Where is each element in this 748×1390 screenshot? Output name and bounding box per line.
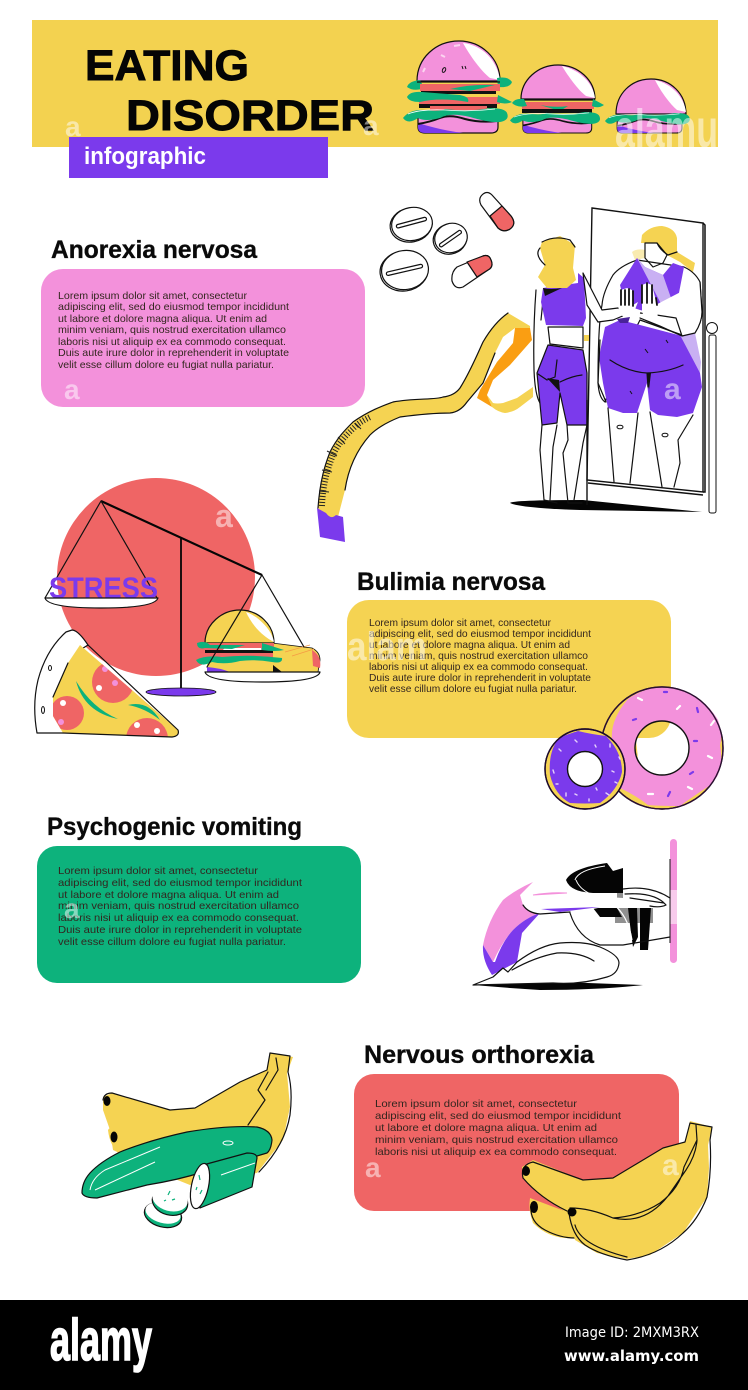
reflection legs <box>608 408 693 487</box>
panel: Psychogenic vomiting <box>37 846 361 983</box>
footer logo: alamy <box>50 1308 152 1373</box>
watermark: banner: a <box>65 111 81 142</box>
illustration: scale with stress and food: a <box>215 498 233 534</box>
illustration: mirror with reflection: a <box>664 373 681 406</box>
illustration: person vomiting over toilet <box>473 839 677 990</box>
left pan strings <box>45 501 157 598</box>
text block: Psychogenic: velit esse cillum dolore eu fugiat nulla pariatur. <box>58 937 286 948</box>
text block: Anorexia: minim veniam, quis nostrud exercitation ullamco <box>58 325 286 336</box>
text block: Nervous orthorexia: ut labore et dolore magna aliqua. Ut enim ad <box>375 1123 597 1134</box>
panel: Anorexia nervosa: a <box>64 374 80 405</box>
woman arms <box>534 290 540 403</box>
text block: Nervous orthorexia: minim veniam, quis nostrud exercitation ullamco <box>375 1135 618 1146</box>
text block: Psychogenic: Duis aute irure dolor in reprehenderit in voluptate <box>58 925 302 936</box>
woman legs <box>540 425 587 503</box>
icon: mirror stand <box>706 322 718 513</box>
woman shorts <box>537 345 587 425</box>
reflection top <box>620 258 684 317</box>
text block: Psychogenic: laboris nisi ut aliquip ex ea commodo consequat. <box>58 913 299 924</box>
panel: Bulimia nervosa <box>347 600 671 738</box>
hot dog <box>262 643 320 672</box>
reflection forearm <box>640 282 702 336</box>
text block: Anorexia: velit esse cillum dolore eu fugiat nulla pariatur. <box>58 360 274 371</box>
right pan strings <box>207 575 304 667</box>
text block: Nervous orthorexia: laboris nisi ut aliquip ex ea commodo consequat. <box>375 1147 617 1158</box>
text block: Bulimia: Duis aute irure dolor in reprehenderit in voluptate <box>369 673 591 684</box>
illustration: mirror with reflection <box>587 208 705 495</box>
icon: pills <box>377 192 514 294</box>
text block: Bulimia: Lorem ipsum dolor sit amet, consectetur <box>369 618 552 629</box>
text block: Bulimia: ut labore et dolore magna aliqua. Ut enim ad <box>369 640 570 651</box>
icon: measuring tape <box>317 313 533 542</box>
icon: medium burger <box>510 65 604 133</box>
illustration: woman from behind <box>534 236 658 505</box>
reflection arms <box>598 260 702 402</box>
icon: large burger <box>403 41 512 133</box>
reflection light halo <box>632 249 645 260</box>
text block: Anorexia: Duis aute irure dolor in reprehenderit in voluptate <box>58 348 289 359</box>
icon: pizza slice <box>34 629 179 738</box>
panel: Anorexia nervosa <box>41 269 365 407</box>
watermark: banner <box>65 99 718 159</box>
text block: Anorexia: ut labore et dolore magna aliqua. Ut enim ad <box>58 314 267 325</box>
woman top <box>541 273 586 326</box>
reflection belly and shorts <box>599 320 702 417</box>
text block: Anorexia: Lorem ipsum dolor sit amet, consectetur <box>58 291 248 302</box>
footer image id: Image ID: 2MXM3RX <box>565 1325 699 1341</box>
top pink <box>483 882 540 962</box>
title: EATING <box>85 42 249 90</box>
reflection hair <box>641 226 695 272</box>
floor shadow <box>473 980 643 990</box>
panel: title banner <box>32 20 718 159</box>
burger on pan <box>196 610 284 672</box>
woman waist <box>548 327 583 348</box>
cucumber <box>82 1127 272 1198</box>
arm <box>523 893 628 914</box>
panel: Bulimia nervosa: alam <box>347 625 427 669</box>
text block: Psychogenic: Lorem ipsum dolor sit amet, consectetur <box>58 866 259 877</box>
icon: small burger <box>605 79 690 133</box>
text block: Psychogenic: ut labore et dolore magna aliqua. Ut enim ad <box>58 890 279 901</box>
label: infographic: infographic <box>84 143 206 170</box>
title: DISORDER <box>126 92 374 140</box>
reflection head <box>645 243 667 267</box>
illustration: scale with stress and food <box>45 478 320 696</box>
icon: purple donut <box>545 729 625 809</box>
text block: Anorexia: adipiscing elit, sed do eiusmod tempor incididunt <box>58 302 289 313</box>
text block: Bulimia: adipiscing elit, sed do eiusmod tempor incididunt <box>369 629 591 640</box>
top purple <box>483 913 540 975</box>
woman hair <box>538 236 576 288</box>
stress label: STRESS <box>49 572 158 605</box>
reflection light stripe low <box>680 333 701 373</box>
heading: Psychogenic vomiting: Psychogenic vomiting <box>47 813 302 841</box>
cucumber slices <box>142 1198 184 1232</box>
label: infographic <box>69 137 328 178</box>
text block: Psychogenic: adipiscing elit, sed do eiusmod tempor incididunt <box>58 878 302 889</box>
legs <box>473 942 619 985</box>
icon: bananas: a <box>662 1149 679 1182</box>
right pan <box>205 672 320 682</box>
text block: Nervous orthorexia: Lorem ipsum dolor sit amet, consectetur <box>375 1099 578 1110</box>
footer url: www.alamy.com <box>564 1347 699 1365</box>
heading: Anorexia nervosa: Anorexia nervosa <box>51 236 258 264</box>
panel: Nervous orthorexia <box>354 1074 679 1211</box>
text block: Anorexia: laboris nisi ut aliquip ex ea commodo consequat. <box>58 337 286 348</box>
shadow under figure <box>510 500 702 512</box>
icon: pink donut <box>600 680 723 809</box>
reflection body lines <box>610 360 683 387</box>
red circle <box>57 478 255 676</box>
panel: Nervous orthorexia: a <box>365 1152 381 1183</box>
text block: Psychogenic: minim veniam, quis nostrud exercitation ullamco <box>58 901 299 912</box>
icon: bananas <box>522 1121 712 1260</box>
heading: Bulimia nervosa: Bulimia nervosa <box>357 568 546 596</box>
wall bar <box>670 839 677 963</box>
title <box>85 42 374 140</box>
watermark: banner: a <box>363 110 379 141</box>
hair <box>566 863 623 893</box>
text block: Bulimia: laboris nisi ut aliquip ex ea commodo consequat. <box>369 662 588 673</box>
footer bar <box>0 1300 748 1390</box>
text block: Bulimia: minim veniam, quis nostrud exercitation ullamco <box>369 651 588 662</box>
woman arm <box>583 273 625 322</box>
scale beam and post <box>101 501 262 696</box>
heading: Nervous orthorexia: Nervous orthorexia <box>364 1041 595 1069</box>
left pan <box>45 598 158 608</box>
hands <box>617 283 658 323</box>
cucumber cut <box>200 1153 257 1208</box>
text block: Nervous orthorexia: adipiscing elit, sed do eiusmod tempor incididunt <box>375 1111 621 1122</box>
illustration: banana and cucumber <box>82 1053 293 1232</box>
panel: Psychogenic vomiting: a <box>64 893 80 924</box>
text block: Bulimia: velit esse cillum dolore eu fugiat nulla pariatur. <box>369 684 577 695</box>
reflection light stripe high <box>637 258 678 318</box>
toilet <box>593 888 670 950</box>
